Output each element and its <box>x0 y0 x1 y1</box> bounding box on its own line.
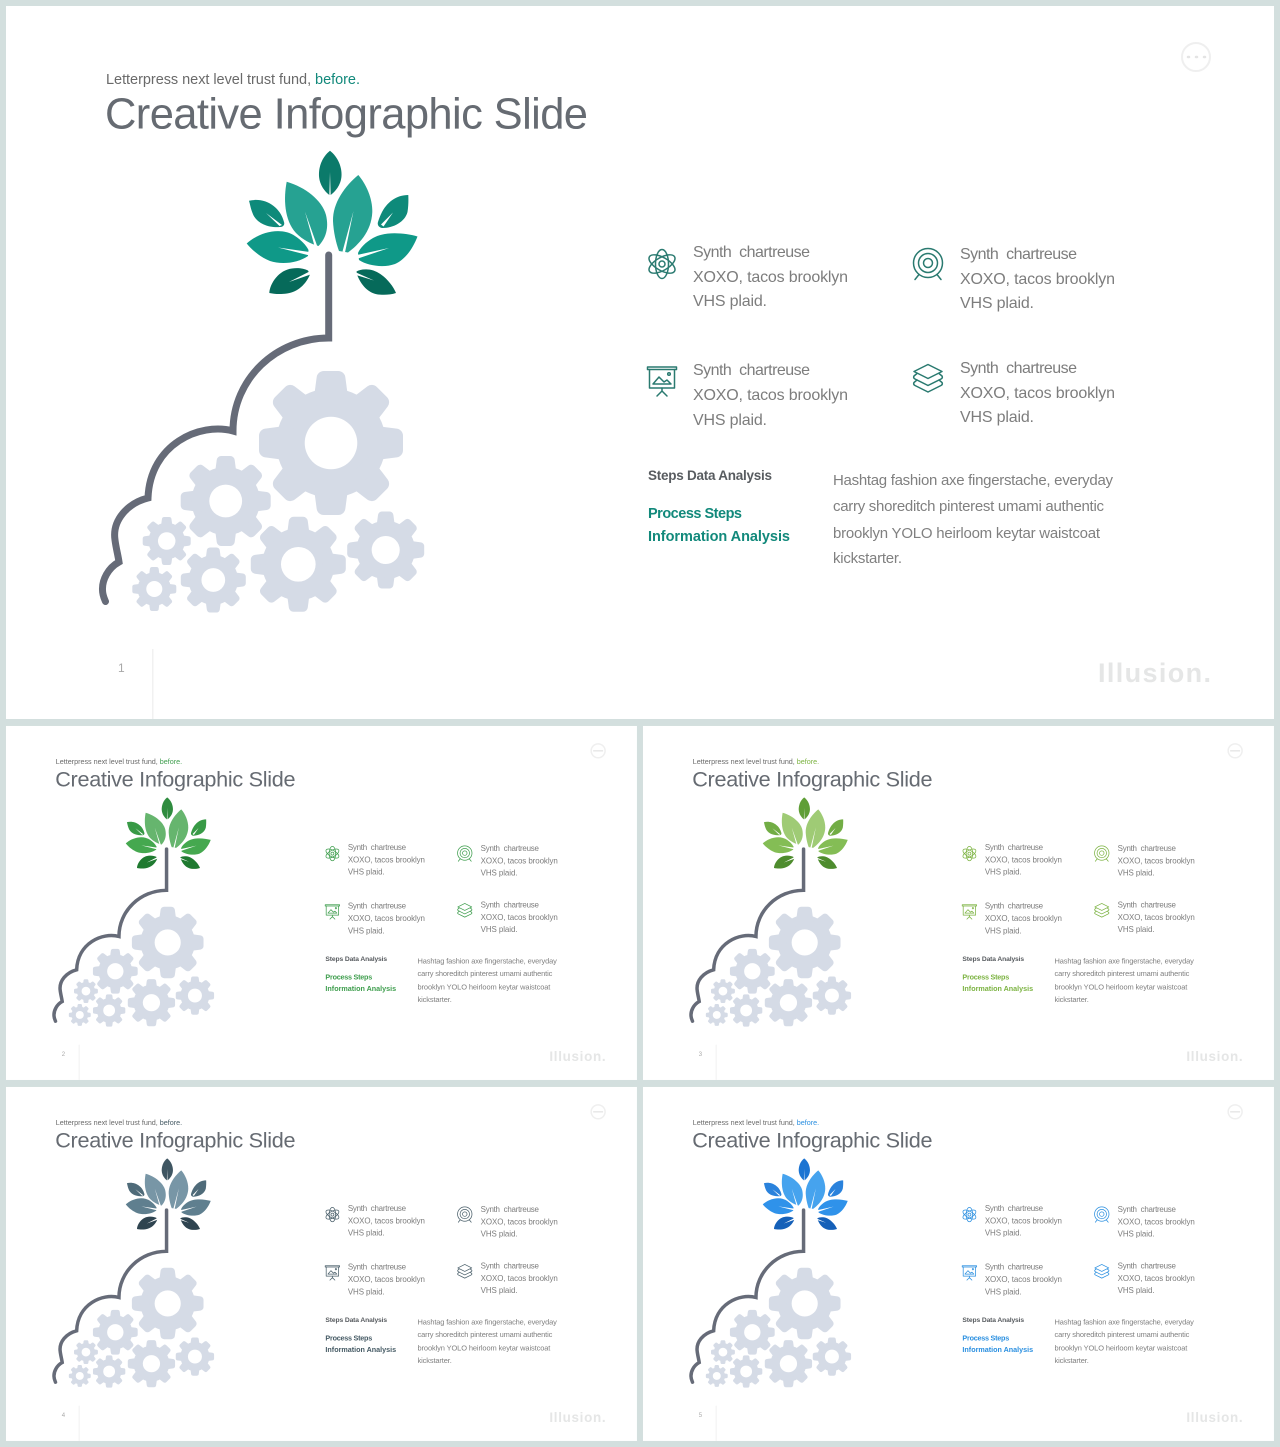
slide 5 feature text 4: XOXO, tacos brooklyn <box>1118 1274 1195 1283</box>
slide 4 feature text 2: XOXO, tacos brooklyn <box>481 1218 558 1227</box>
slide 4 tree leaves <box>126 1158 211 1230</box>
slide 4 body paragraph <box>418 1317 557 1365</box>
slide 3 feature text 4 <box>1118 901 1195 934</box>
slide 1 body paragraph: brooklyn YOLO heirloom keytar waistcoat <box>833 525 1101 542</box>
slide 1 feature text 3: Synth chartreuse <box>693 362 810 379</box>
slide 5 icon: target <box>1095 1207 1109 1222</box>
panel: slide 3 lime <box>643 726 1274 1080</box>
slide 4 feature text 4: Synth chartreuse <box>481 1262 539 1271</box>
slide 2 gears <box>70 910 212 1025</box>
slide 4 process heading <box>325 1334 396 1354</box>
slide 2 feature text 3: XOXO, tacos brooklyn <box>348 914 425 923</box>
slide 1 feature text 2: XOXO, tacos brooklyn <box>960 271 1115 288</box>
slide 1 process heading: Information Analysis <box>648 529 790 545</box>
slide 1 feature text 3 <box>693 362 848 429</box>
slide 5 feature text 3: Synth chartreuse <box>985 1263 1044 1272</box>
slide 3 feature text 2: VHS plaid. <box>1118 868 1155 877</box>
slide 1 feature text 4: XOXO, tacos brooklyn <box>960 385 1115 402</box>
slide 2 stem line <box>54 849 167 1021</box>
slide 5 page number: 5 <box>699 1413 703 1419</box>
slide 3 stem line <box>691 849 804 1021</box>
slide 2 icon: target <box>458 846 472 861</box>
slide 3 menu icon <box>1228 744 1242 758</box>
slide 2 feature text 2: VHS plaid. <box>481 868 518 877</box>
slide 3 feature text 4: Synth chartreuse <box>1118 901 1176 910</box>
slide 2 feature text 4: XOXO, tacos brooklyn <box>481 913 558 922</box>
slide 3 gears <box>707 910 849 1025</box>
slide 4 title: Creative Infographic Slide <box>55 1127 296 1152</box>
slide 2 page number: 2 <box>62 1052 66 1058</box>
slide 4 menu icon <box>591 1105 605 1119</box>
slide 4 process heading: Information Analysis <box>325 1345 396 1354</box>
slide 1 feature text 3: XOXO, tacos brooklyn <box>693 387 848 404</box>
slide 5 feature text 3: XOXO, tacos brooklyn <box>985 1275 1062 1284</box>
slide 4 feature text 3: XOXO, tacos brooklyn <box>348 1275 425 1284</box>
slide 1 title: Creative Infographic Slide <box>105 90 588 138</box>
slide 2 body paragraph: kickstarter. <box>418 995 452 1004</box>
slide 4 body paragraph: carry shoreditch pinterest umami authentic <box>418 1330 553 1339</box>
slide 5 card <box>643 1087 1274 1441</box>
slide 3 body paragraph: kickstarter. <box>1055 995 1089 1004</box>
slide 3 feature text 3 <box>985 902 1062 936</box>
slide 3 feature text 3: XOXO, tacos brooklyn <box>985 914 1062 923</box>
slide 1 steps heading: Steps Data Analysis <box>648 468 772 483</box>
slide 5 feature text 4: Synth chartreuse <box>1118 1262 1176 1271</box>
slide 3 body paragraph: Hashtag fashion axe fingerstache, everyday <box>1055 956 1194 965</box>
slide 5 feature text 3 <box>985 1263 1062 1297</box>
panel: slide 5 blue <box>643 1087 1274 1441</box>
slide 5 subtitle: Letterpress next level trust fund, before. <box>693 1118 819 1127</box>
slide 5 feature text 2 <box>1118 1205 1195 1238</box>
slide 3 process heading <box>962 973 1033 993</box>
slide 1 feature text 1: Synth chartreuse <box>693 244 810 261</box>
slide 1 gears <box>134 378 420 609</box>
slide 5 feature text 4 <box>1118 1262 1195 1295</box>
slide 4 feature text 3 <box>348 1263 425 1297</box>
slide 4 icon: atom <box>325 1207 340 1222</box>
slide 1 body paragraph: Hashtag fashion axe fingerstache, everyday <box>833 472 1114 489</box>
slide 2 feature text 3: Synth chartreuse <box>348 902 407 911</box>
slide 2 menu icon <box>591 744 605 758</box>
slide 4 page number: 4 <box>62 1413 66 1419</box>
slide 2 body paragraph: carry shoreditch pinterest umami authentic <box>418 969 553 978</box>
slide 1 brand wordmark: Illusion. <box>1098 658 1211 688</box>
slide 2 feature text 3: VHS plaid. <box>348 927 385 936</box>
slide 4 feature text 2: Synth chartreuse <box>481 1205 539 1214</box>
slide 4 feature text 2 <box>481 1205 558 1238</box>
slide 5 process heading: Information Analysis <box>962 1345 1033 1354</box>
slide 5 feature text 1: XOXO, tacos brooklyn <box>985 1217 1062 1226</box>
slide 3 feature text 2 <box>1118 844 1195 877</box>
slide 2 body paragraph: Hashtag fashion axe fingerstache, everyday <box>418 956 557 965</box>
slide 2 feature text 1: VHS plaid. <box>348 867 385 876</box>
slide 2 process heading <box>325 973 396 993</box>
slide 5 feature text 4: VHS plaid. <box>1118 1286 1155 1295</box>
slide 4 body paragraph: brooklyn YOLO heirloom keytar waistcoat <box>418 1344 551 1353</box>
slide 5 icon: presentation board <box>962 1266 977 1280</box>
slide 1 subtitle: Letterpress next level trust fund, before. <box>106 72 360 88</box>
slide 2 card <box>6 726 637 1080</box>
slide 3 body paragraph <box>1055 956 1194 1004</box>
panel: slide 2 green <box>6 726 637 1080</box>
slide 4 feature text 2: VHS plaid. <box>481 1229 518 1238</box>
slide 3 process heading: Process Steps <box>962 973 1009 982</box>
slide 4 subtitle: Letterpress next level trust fund, before. <box>56 1118 182 1127</box>
slide 1 body paragraph <box>833 472 1114 567</box>
slide 3 feature text 1: XOXO, tacos brooklyn <box>985 856 1062 865</box>
slide 4 feature text 3: Synth chartreuse <box>348 1263 407 1272</box>
slide 3 process heading: Information Analysis <box>962 984 1033 993</box>
slide 5 stem line <box>691 1210 804 1382</box>
slide 3 subtitle: Letterpress next level trust fund, before. <box>693 757 819 766</box>
slide 2 feature text 2 <box>481 844 558 877</box>
slide 5 feature text 2: Synth chartreuse <box>1118 1205 1176 1214</box>
slide 3 icon: target <box>1095 846 1109 861</box>
slide 4 stem line <box>54 1210 167 1382</box>
slide 2 icon: layers <box>458 903 472 917</box>
slide 2 icon: atom <box>325 846 340 861</box>
slide 4 steps heading: Steps Data Analysis <box>325 1317 387 1324</box>
slide 5 icon: atom <box>962 1207 977 1222</box>
slide 2 feature text 4 <box>481 901 558 934</box>
slide 1 tree leaves <box>247 151 418 295</box>
slide 3 feature text 3: VHS plaid. <box>985 927 1022 936</box>
slide 5 feature text 2: XOXO, tacos brooklyn <box>1118 1218 1195 1227</box>
slide 2 process heading: Information Analysis <box>325 984 396 993</box>
slide 3 feature text 2: Synth chartreuse <box>1118 844 1176 853</box>
slide 1 icon: presentation board <box>648 367 676 396</box>
slide 5 icon: layers <box>1095 1264 1109 1278</box>
slide 1 process heading: Process Steps <box>648 506 742 522</box>
slide 2 feature text 1: Synth chartreuse <box>348 843 407 852</box>
slide 5 feature text 2: VHS plaid. <box>1118 1229 1155 1238</box>
slide 4 feature text 1 <box>348 1204 425 1237</box>
slide 4 feature text 4: VHS plaid. <box>481 1286 518 1295</box>
slide 5 feature text 1 <box>985 1204 1062 1237</box>
slide 2 feature text 2: Synth chartreuse <box>481 844 539 853</box>
slide 5 body paragraph: carry shoreditch pinterest umami authentic <box>1055 1330 1190 1339</box>
slide 3 body paragraph: carry shoreditch pinterest umami authentic <box>1055 969 1190 978</box>
slide 3 tree leaves <box>763 797 848 869</box>
slide 1 feature text 4 <box>960 360 1115 426</box>
slide 3 icon: atom <box>962 846 977 861</box>
slide 4 icon: layers <box>458 1264 472 1278</box>
slide 1 feature text 1: XOXO, tacos brooklyn <box>693 269 848 286</box>
slide 1 stem line <box>102 255 329 602</box>
slide 1 feature text 1 <box>693 244 848 310</box>
slide 1 feature text 3: VHS plaid. <box>693 412 767 429</box>
slide 3 title: Creative Infographic Slide <box>692 766 933 791</box>
slide 3 feature text 2: XOXO, tacos brooklyn <box>1118 857 1195 866</box>
slide 2 body paragraph: brooklyn YOLO heirloom keytar waistcoat <box>418 983 551 992</box>
slide 5 gears <box>707 1271 849 1386</box>
slide 1 body paragraph: kickstarter. <box>833 550 902 567</box>
slide 1 process heading <box>648 506 790 545</box>
slide 2 title: Creative Infographic Slide <box>55 766 296 791</box>
slide 5 process heading <box>962 1334 1033 1354</box>
slide 2 feature text 3 <box>348 902 425 936</box>
slide 5 menu icon <box>1228 1105 1242 1119</box>
slide 1 card <box>6 6 1274 719</box>
slide 5 body paragraph: Hashtag fashion axe fingerstache, everyday <box>1055 1317 1194 1326</box>
slide 5 process heading: Process Steps <box>962 1334 1009 1343</box>
slide 5 feature text 1: Synth chartreuse <box>985 1204 1044 1213</box>
slide 3 icon: layers <box>1095 903 1109 917</box>
slide 4 feature text 4 <box>481 1262 558 1295</box>
slide 2 process heading: Process Steps <box>325 973 372 982</box>
panel: slide 1 teal <box>6 6 1274 719</box>
slide 4 icon: target <box>458 1207 472 1222</box>
slide 1 feature text 2 <box>960 246 1115 312</box>
slide 5 body paragraph: brooklyn YOLO heirloom keytar waistcoat <box>1055 1344 1188 1353</box>
slide 4 card <box>6 1087 637 1441</box>
slide 5 feature text 3: VHS plaid. <box>985 1288 1022 1297</box>
slide 1 icon: layers <box>914 364 942 392</box>
slide 2 feature text 4: VHS plaid. <box>481 925 518 934</box>
panel: slide 4 slate <box>6 1087 637 1441</box>
slide 4 icon: presentation board <box>325 1266 340 1280</box>
slide 5 steps heading: Steps Data Analysis <box>962 1317 1024 1324</box>
slide 4 body paragraph: Hashtag fashion axe fingerstache, everyday <box>418 1317 557 1326</box>
slide 1 page number: 1 <box>118 661 125 675</box>
slide 5 brand wordmark: Illusion. <box>1186 1410 1243 1425</box>
slide 3 feature text 4: VHS plaid. <box>1118 925 1155 934</box>
slide 4 body paragraph: kickstarter. <box>418 1356 452 1365</box>
slide 1 icon: target <box>914 248 942 280</box>
slide 2 brand wordmark: Illusion. <box>549 1049 606 1064</box>
slide 3 body paragraph: brooklyn YOLO heirloom keytar waistcoat <box>1055 983 1188 992</box>
slide 2 tree leaves <box>126 797 211 869</box>
slide 3 feature text 4: XOXO, tacos brooklyn <box>1118 913 1195 922</box>
slide 3 feature text 3: Synth chartreuse <box>985 902 1044 911</box>
slide 3 icon: presentation board <box>962 905 977 919</box>
slide 2 body paragraph <box>418 956 557 1004</box>
slide 5 feature text 1: VHS plaid. <box>985 1228 1022 1237</box>
slide 1 menu icon <box>1182 43 1210 71</box>
slide 4 process heading: Process Steps <box>325 1334 372 1343</box>
slide 3 card <box>643 726 1274 1080</box>
slide 1 feature text 2: Synth chartreuse <box>960 246 1077 263</box>
slide 2 subtitle: Letterpress next level trust fund, before. <box>56 757 182 766</box>
slide 2 feature text 4: Synth chartreuse <box>481 901 539 910</box>
slide 3 page number: 3 <box>699 1052 703 1058</box>
slide 1 feature text 2: VHS plaid. <box>960 295 1034 312</box>
slide 4 feature text 1: XOXO, tacos brooklyn <box>348 1217 425 1226</box>
slide 2 icon: presentation board <box>325 905 340 919</box>
slide 3 brand wordmark: Illusion. <box>1186 1049 1243 1064</box>
slide 1 icon: atom <box>646 250 678 278</box>
slide 5 body paragraph: kickstarter. <box>1055 1356 1089 1365</box>
slide 3 feature text 1: VHS plaid. <box>985 867 1022 876</box>
slide 4 feature text 1: Synth chartreuse <box>348 1204 407 1213</box>
slide 5 body paragraph <box>1055 1317 1194 1365</box>
slide 2 feature text 1 <box>348 843 425 876</box>
slide 4 feature text 3: VHS plaid. <box>348 1288 385 1297</box>
slide 5 title: Creative Infographic Slide <box>692 1127 933 1152</box>
slide 1 feature text 4: Synth chartreuse <box>960 360 1077 377</box>
slide 3 steps heading: Steps Data Analysis <box>962 956 1024 963</box>
slide 2 steps heading: Steps Data Analysis <box>325 956 387 963</box>
slide 1 feature text 1: VHS plaid. <box>693 293 767 310</box>
slide 1 body paragraph: carry shoreditch pinterest umami authentic <box>833 498 1104 515</box>
slide 4 brand wordmark: Illusion. <box>549 1410 606 1425</box>
slide 4 feature text 1: VHS plaid. <box>348 1228 385 1237</box>
slide 1 feature text 4: VHS plaid. <box>960 409 1034 426</box>
slide 3 feature text 1: Synth chartreuse <box>985 843 1044 852</box>
slide 3 feature text 1 <box>985 843 1062 876</box>
slide 2 feature text 1: XOXO, tacos brooklyn <box>348 856 425 865</box>
slide 2 feature text 2: XOXO, tacos brooklyn <box>481 857 558 866</box>
slide 5 tree leaves <box>763 1158 848 1230</box>
slide 4 gears <box>70 1271 212 1386</box>
slide 4 feature text 4: XOXO, tacos brooklyn <box>481 1274 558 1283</box>
